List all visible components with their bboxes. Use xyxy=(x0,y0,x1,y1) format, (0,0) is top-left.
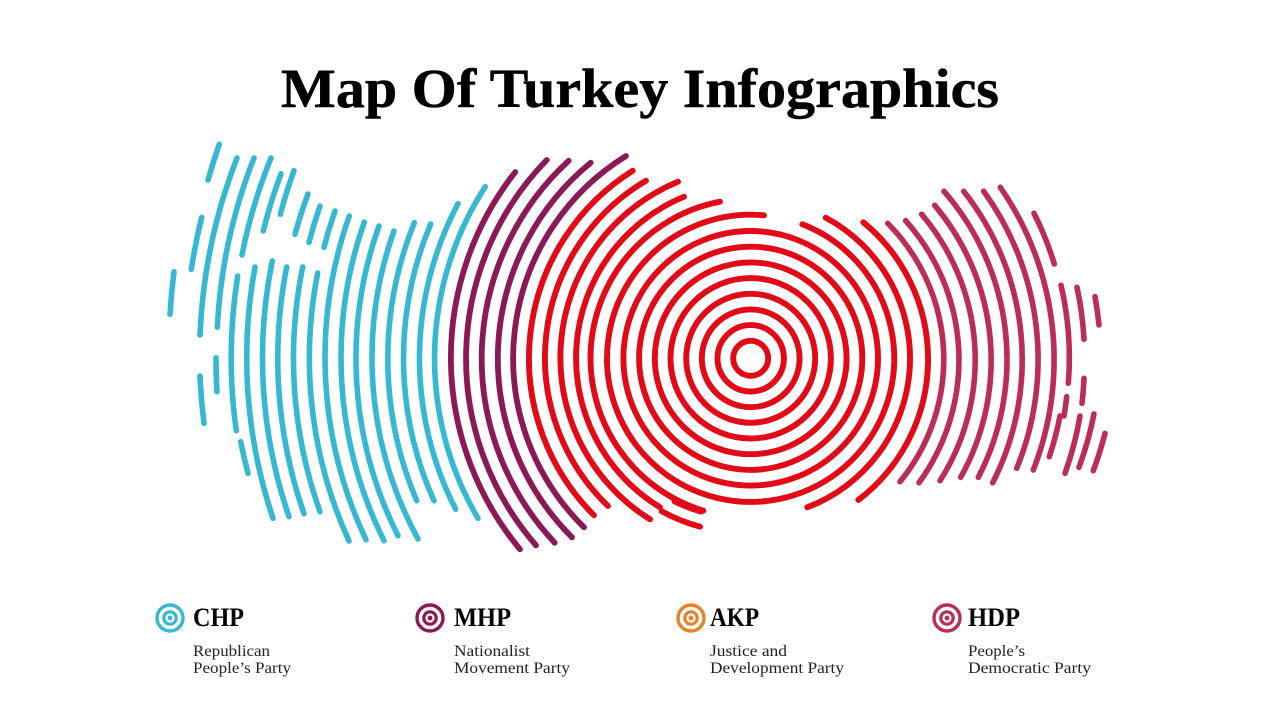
CHP region arcs xyxy=(170,144,485,541)
legend: MHP xyxy=(417,603,570,677)
icon: AKP target xyxy=(678,605,704,631)
title: Map Of Turkey Infographics xyxy=(281,58,999,119)
text: Nationalist Movement Party: Movement Party xyxy=(454,660,570,677)
heading: AKP: AKP xyxy=(710,603,759,632)
icon: HDP target xyxy=(934,605,960,631)
text: Justice and Development Party: Development Party xyxy=(710,660,844,677)
text: Republican People's Party: Republican xyxy=(193,643,270,660)
icon: CHP target xyxy=(157,605,183,631)
text: Justice and Development Party xyxy=(710,643,844,677)
AKP region arcs xyxy=(529,171,928,527)
text: Nationalist Movement Party: Nationalist xyxy=(454,643,531,660)
legend: HDP xyxy=(934,603,1091,677)
text: People's Democratic Party xyxy=(968,643,1091,677)
text: Nationalist Movement Party xyxy=(454,643,570,677)
text: Republican People's Party: People’s Party xyxy=(193,660,291,677)
heading: MHP: MHP xyxy=(454,603,511,632)
HDP region arcs xyxy=(888,187,1105,483)
MHP region arcs xyxy=(451,156,626,549)
heading: CHP: CHP xyxy=(193,603,244,632)
legend: AKP xyxy=(678,603,844,677)
heading: HDP: HDP xyxy=(968,603,1020,632)
legend: CHP xyxy=(157,603,291,677)
text: Justice and Development Party: Justice and xyxy=(710,643,787,660)
map of Turkey made of concentric arcs xyxy=(170,144,1105,549)
text: People's Democratic Party: People’s xyxy=(968,643,1025,660)
icon: MHP target xyxy=(417,605,443,631)
text: People's Democratic Party: Democratic Party xyxy=(968,660,1091,677)
text: Republican People's Party xyxy=(193,643,291,677)
